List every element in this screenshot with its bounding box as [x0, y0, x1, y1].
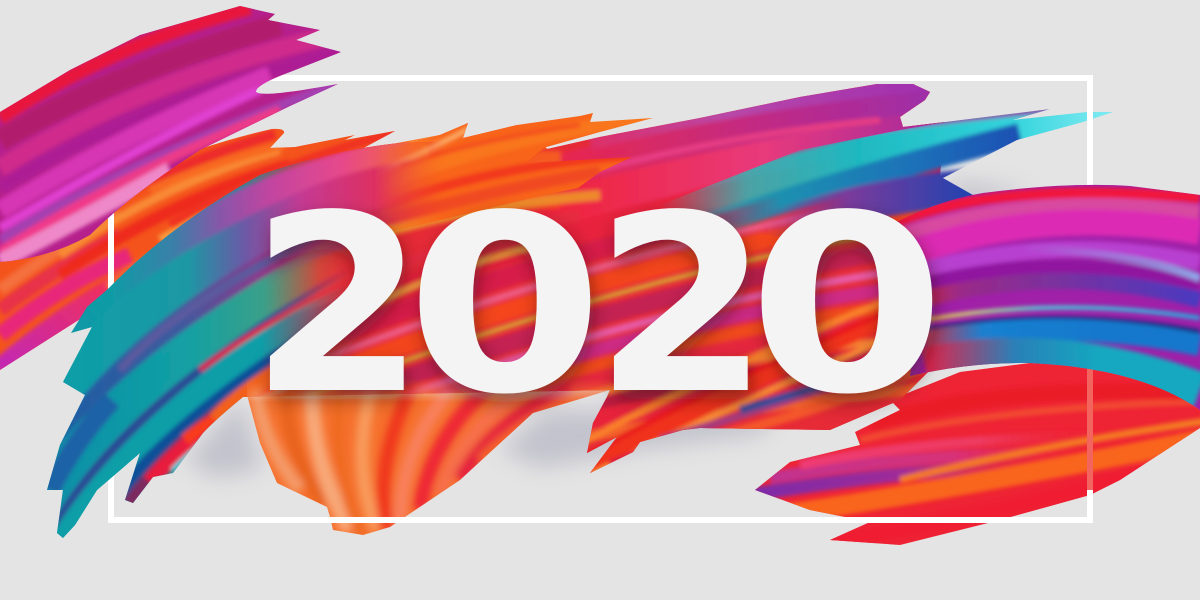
soft shadows on background [185, 180, 1030, 478]
brush stroke: teal upper right [660, 108, 1115, 235]
brush stroke: orange band behind frame [0, 123, 548, 370]
title: 2020: 2 [250, 162, 426, 448]
brush stroke: top left magenta [0, 0, 345, 265]
brush stroke: right purple and teal [895, 180, 1200, 415]
brush stroke: main diagonal teal to magenta [47, 84, 945, 538]
frame tint over lower right stroke [1087, 365, 1093, 490]
frame right segment [1087, 75, 1093, 187]
title: 2020 [250, 162, 946, 448]
centre red and orange streaks [263, 167, 941, 444]
title: 2020: 0 [748, 163, 946, 448]
title: 2020: 0 [406, 163, 604, 448]
lower right fragment orange streaks [587, 296, 927, 473]
brush stroke: orange spikes on top [381, 113, 653, 230]
brush stroke: lower right red [750, 360, 1200, 550]
frame bottom segment over blob [300, 517, 420, 523]
purple and orange upper left streaks [55, 155, 600, 455]
magenta upper streaks [536, 84, 945, 218]
brush stroke: lower orange blob [247, 380, 611, 535]
white frame [111, 78, 1090, 520]
title: 2020: 2 [594, 162, 770, 448]
teal and red lower left streaks [47, 240, 348, 538]
